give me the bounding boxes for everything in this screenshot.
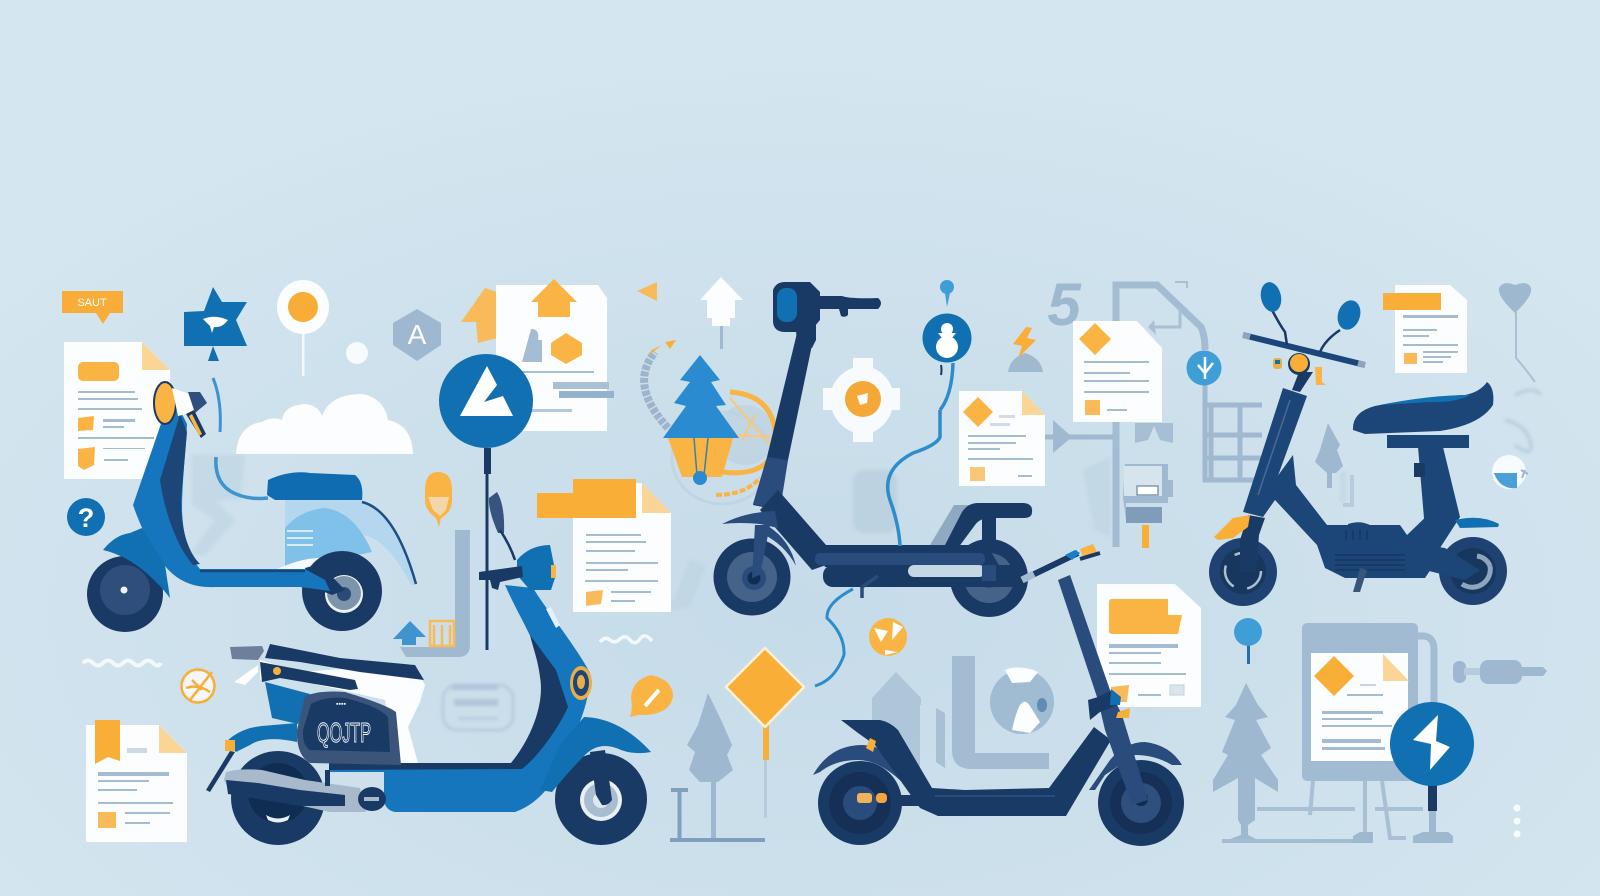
icon: orange leaf badge bbox=[630, 675, 673, 717]
illustration: large blue scooter: ▪▪▪▪ bbox=[336, 701, 346, 708]
icon: small white dot bbox=[346, 342, 368, 364]
icon: orange bulb bbox=[425, 472, 452, 527]
mirror bbox=[489, 492, 504, 533]
illustration: navy kick scooter centre bbox=[714, 282, 1032, 617]
icon: grey hexagon badge A bbox=[393, 309, 441, 361]
illustration: navy kick scooter bottom bbox=[813, 544, 1184, 846]
headlamp and mirror bbox=[154, 382, 176, 424]
front wheel bbox=[714, 538, 790, 616]
squiggle: white left bbox=[83, 660, 161, 666]
gear arc with orange arrows bbox=[644, 340, 676, 428]
deck stripe bbox=[908, 565, 985, 577]
frame bbox=[760, 490, 826, 570]
tag: SAUT speech label: SAUT bbox=[77, 297, 107, 309]
handlebar bbox=[1243, 335, 1365, 365]
numeral: grey 5: 5 bbox=[1047, 271, 1082, 338]
document: top centre bbox=[496, 279, 614, 431]
icon: blue person circle with cable bbox=[888, 280, 972, 546]
icon: white gear with orange centre bbox=[823, 358, 900, 442]
sign post bbox=[1428, 780, 1437, 811]
head bbox=[517, 545, 556, 590]
icon: orange pin bbox=[277, 280, 329, 376]
document: diamond upper right bbox=[1073, 321, 1162, 422]
hub pills bbox=[857, 793, 872, 803]
white dots bbox=[1514, 804, 1520, 838]
grab rail bbox=[230, 646, 264, 660]
logo badge bbox=[570, 666, 592, 700]
white seat body bbox=[260, 660, 425, 763]
fork and mast bbox=[1058, 575, 1148, 805]
rear rail bbox=[930, 505, 970, 545]
front wheel bbox=[555, 753, 647, 845]
vent bbox=[1335, 530, 1405, 570]
seat cushion dark bbox=[265, 644, 424, 680]
document: folder bottom right bbox=[1097, 584, 1201, 707]
icon: orange crossed circle bbox=[182, 670, 214, 702]
pipe and connector lines bbox=[1418, 636, 1434, 705]
rear body bbox=[285, 500, 416, 585]
seat bbox=[267, 472, 362, 500]
icon: half-filled blue circle bbox=[1492, 455, 1528, 489]
icon: lightning circle bbox=[1390, 702, 1474, 786]
rear wheel bbox=[1439, 537, 1507, 605]
head bbox=[773, 282, 820, 332]
document: diamond mid bbox=[959, 391, 1045, 486]
signpost: blue circle with white mark bbox=[439, 354, 533, 650]
icon: orange ball bbox=[869, 618, 907, 656]
rear wheel bbox=[231, 751, 325, 845]
rear wheel bbox=[302, 551, 382, 631]
arrow: blue bbox=[393, 621, 426, 645]
battery panel bbox=[297, 692, 401, 765]
icon: question mark circle: ? bbox=[78, 503, 94, 533]
board bbox=[1302, 623, 1418, 781]
illustration: cloud bbox=[236, 394, 413, 454]
infographic board on legs bbox=[1222, 623, 1474, 843]
handlebar bbox=[1022, 553, 1078, 580]
illustration: large blue scooter bbox=[206, 492, 651, 845]
icon: orange house arrow bbox=[461, 288, 497, 343]
seat and strut bbox=[841, 720, 1111, 816]
cable bbox=[216, 457, 268, 498]
icon: white house arrow bbox=[700, 277, 743, 349]
document: bottom left with bookmark bbox=[86, 720, 187, 842]
swing arm bbox=[305, 564, 345, 595]
orange fender bbox=[1214, 515, 1250, 540]
headlamp bbox=[1288, 353, 1310, 375]
label on battery panel: QOJTP bbox=[317, 717, 371, 748]
icon: grey meter bbox=[1123, 464, 1173, 548]
mast bbox=[1243, 388, 1307, 517]
icon: grey tree with bench bbox=[670, 693, 765, 842]
fender bbox=[540, 717, 651, 792]
body bbox=[329, 585, 590, 812]
rear fender bbox=[813, 745, 905, 785]
icon: grey tree mid right bbox=[1315, 423, 1352, 505]
icon: blue circle with arrow bbox=[1186, 350, 1222, 386]
grid: orange bbox=[430, 621, 454, 646]
fender bbox=[103, 528, 170, 598]
icon: grey hexagon badge A: A bbox=[408, 319, 427, 350]
squiggle: white centre bbox=[600, 636, 652, 643]
illustration: lantern tree with orange swirl bbox=[663, 355, 776, 504]
front wheel bbox=[87, 556, 163, 632]
mast bbox=[753, 333, 812, 510]
ghost background shapes bbox=[190, 455, 1346, 610]
front wheel bbox=[1098, 760, 1184, 846]
icon: globe bbox=[990, 667, 1054, 734]
cable arc near mirror bbox=[213, 378, 220, 432]
frame bbox=[133, 402, 330, 591]
seat post bbox=[1418, 447, 1460, 530]
fork bbox=[590, 750, 612, 805]
arrow: grey bbox=[1037, 434, 1113, 440]
rear wheel bbox=[950, 539, 1028, 617]
icon: blue star flag bbox=[184, 287, 247, 363]
document: centre with orange folder bbox=[537, 479, 671, 612]
icon: orange hexagon face bbox=[551, 333, 582, 364]
fender bbox=[722, 511, 778, 528]
illustration: navy moped right bbox=[1209, 280, 1507, 606]
front fender bbox=[1089, 742, 1182, 790]
icon: question mark circle bbox=[67, 498, 105, 536]
ghost pine and L-shape behind scooter bbox=[872, 656, 1049, 770]
icon: grey plug bbox=[1453, 660, 1547, 684]
kickstand bbox=[862, 576, 878, 598]
cable: lower blue bbox=[815, 589, 853, 686]
icon: orange triangle bbox=[637, 282, 657, 301]
rear body blue bbox=[265, 682, 310, 724]
icon: orange house bbox=[531, 279, 577, 317]
ghost rounded box bbox=[443, 684, 513, 730]
mirrors bbox=[1272, 310, 1340, 352]
route diagram: grey connector pipes bbox=[1037, 282, 1262, 547]
dark inner bbox=[329, 635, 568, 770]
seat bbox=[1353, 382, 1493, 434]
muffler bbox=[224, 769, 366, 812]
icon: grey figure bbox=[522, 329, 542, 362]
ghost banner bbox=[1135, 423, 1173, 443]
rear wheel bbox=[818, 761, 902, 845]
icon: orange road sign bbox=[726, 648, 804, 818]
L-shaped grey pipe with arrow and grid bbox=[393, 530, 470, 657]
icon: large grey tree bbox=[1213, 683, 1278, 842]
icon: orange bolt on mound bbox=[1008, 327, 1043, 372]
document: left with orange pill bbox=[64, 342, 170, 479]
rear light bbox=[225, 740, 235, 751]
front wheel bbox=[1209, 538, 1277, 606]
frame bbox=[1260, 455, 1460, 578]
icon: blue map pin bbox=[1234, 618, 1262, 664]
tag: SAUT speech label bbox=[62, 291, 123, 324]
arm to rear wheel bbox=[1425, 545, 1480, 580]
document: top right with banner bbox=[1383, 285, 1467, 373]
icon: grey heart pin bbox=[1499, 283, 1540, 451]
illustration: blue scooter top left bbox=[87, 382, 416, 632]
